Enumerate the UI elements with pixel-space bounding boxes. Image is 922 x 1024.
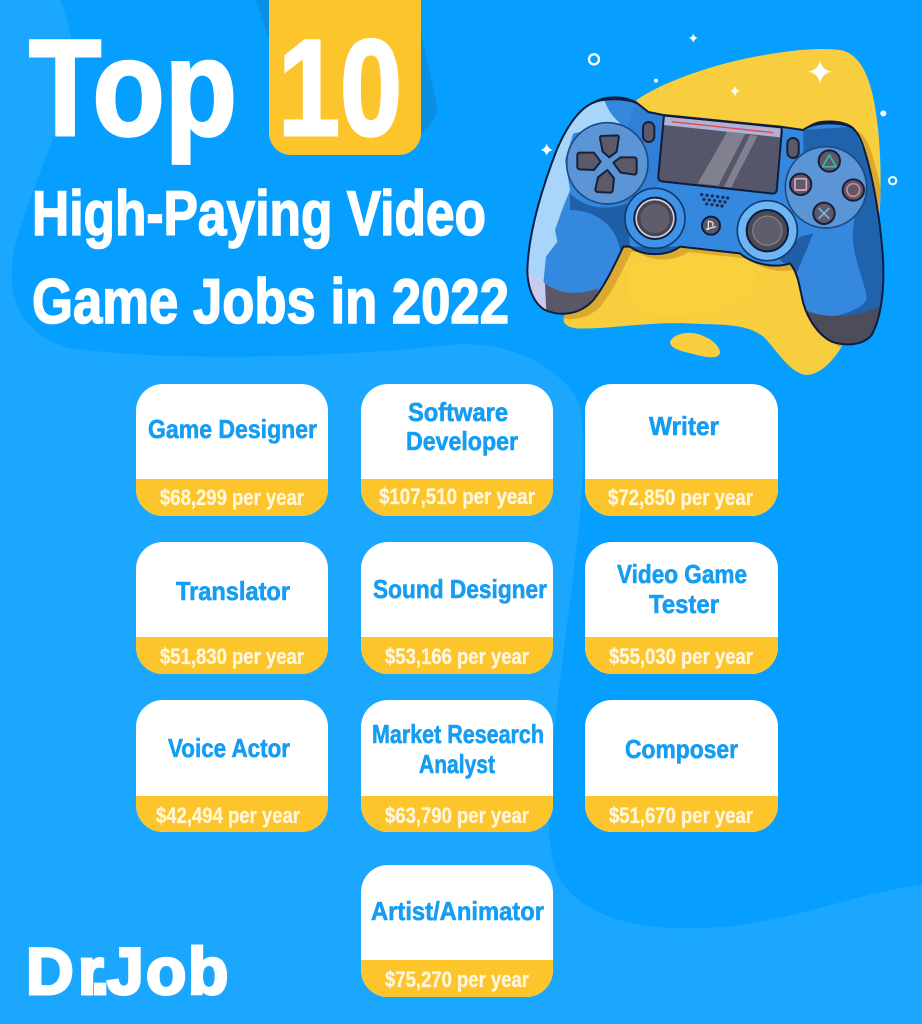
subtitle: Game Jobs in 2022 (32, 267, 509, 337)
card: Market Research Analyst: Analyst (419, 749, 495, 779)
card: Artist/Animator: Artist/Animator (371, 896, 544, 926)
card: Video Game Tester (585, 542, 778, 674)
card: Voice Actor: $42,494 per year (156, 803, 300, 828)
badge: 10: 10 (278, 12, 402, 165)
card: Translator (136, 542, 328, 674)
card: Composer (585, 700, 778, 832)
touchpad (658, 116, 782, 194)
card: Sound Designer (361, 542, 553, 674)
speaker dots (700, 193, 729, 208)
card: Game Designer: Game Designer (148, 414, 317, 444)
sparkles (541, 34, 896, 184)
card: Artist/Animator (361, 865, 553, 997)
controller body (520, 97, 887, 350)
card: Software Developer (361, 384, 553, 516)
card: Writer (585, 384, 778, 516)
right analog stick (737, 201, 797, 261)
card: Composer: $51,670 per year (609, 803, 753, 828)
action buttons (785, 147, 867, 228)
card: Writer: $72,850 per year (608, 485, 753, 510)
subtitle: High-Paying Video (32, 179, 486, 249)
card: Writer: Writer (649, 411, 719, 441)
card: Video Game Tester: $55,030 per year (609, 644, 753, 669)
card: Software Developer: Software (408, 397, 508, 427)
card: Artist/Animator: $75,270 per year (385, 967, 529, 992)
card: Voice Actor: Voice Actor (168, 733, 290, 763)
PS button (702, 217, 720, 235)
title: Top: Top (29, 12, 237, 165)
card: Video Game Tester: Video Game (617, 559, 747, 589)
card: Game Designer (136, 384, 328, 516)
card: Market Research Analyst (361, 700, 553, 832)
card: Voice Actor (136, 700, 328, 832)
yellow blob (564, 49, 881, 375)
card: Sound Designer: $53,166 per year (385, 644, 529, 669)
logo: Dr.Job: Dr.Job (26, 934, 228, 1008)
left analog stick (625, 188, 685, 248)
card: Video Game Tester: Tester (649, 589, 719, 619)
card: Translator: $51,830 per year (160, 644, 304, 669)
illustration: game controller on yellow blob (520, 34, 896, 375)
card: Composer: Composer (625, 734, 738, 764)
card: Game Designer: $68,299 per year (160, 485, 304, 510)
card: Software Developer: $107,510 per year (379, 484, 535, 509)
card: Software Developer: Developer (406, 426, 518, 456)
share and options buttons (643, 122, 799, 158)
card: Translator: Translator (176, 576, 290, 606)
card: Market Research Analyst: Market Research (372, 719, 544, 749)
card: Sound Designer: Sound Designer (373, 574, 547, 604)
card: Market Research Analyst: $63,790 per year (385, 803, 529, 828)
subtitle (32, 179, 509, 337)
d-pad (567, 123, 648, 204)
